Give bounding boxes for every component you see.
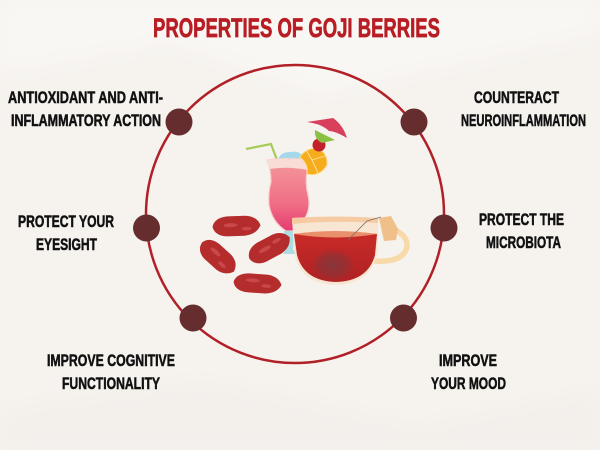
label: protect the microbiota: PROTECT THE — [479, 210, 564, 229]
icon: cup of red tea — [292, 216, 407, 285]
title: PROPERTIES OF GOJI BERRIES — [153, 13, 440, 43]
label: counteract neuroinflammation — [461, 88, 586, 130]
central illustration: cocktail, goji berries and tea — [195, 118, 407, 295]
label: antioxidant: ANTIOXIDANT AND ANTI- — [8, 88, 163, 107]
icon: cocktail glass — [246, 118, 347, 254]
icon: cherry — [312, 138, 326, 152]
label: protect your eyesight: EYESIGHT — [36, 235, 97, 254]
label: antioxidant — [8, 88, 163, 130]
label: improve your mood: IMPROVE — [439, 351, 497, 370]
label: protect the microbiota: MICROBIOTA — [486, 233, 561, 252]
ring connecting the six properties — [146, 65, 444, 363]
icon: paper umbrella — [307, 118, 347, 138]
icon: tea bag tag — [348, 217, 381, 240]
label: counteract neuroinflammation: COUNTERACT — [474, 88, 559, 107]
label: improve your mood: YOUR MOOD — [431, 374, 506, 393]
label: improve cognitive functionality — [47, 351, 175, 393]
label: protect your eyesight — [18, 212, 114, 254]
icon: orange slice — [300, 148, 327, 175]
label: protect the microbiota — [479, 210, 564, 252]
label: improve your mood — [431, 351, 506, 393]
marker dots — [133, 108, 458, 332]
label: improve cognitive functionality: FUNCTIONALITY — [62, 374, 160, 393]
label: improve cognitive functionality: IMPROVE COGNITIVE — [47, 351, 175, 370]
icon: goji berries — [195, 215, 295, 295]
label: antioxidant: INFLAMMATORY ACTION — [11, 111, 161, 130]
label: protect your eyesight: PROTECT YOUR — [18, 212, 114, 231]
